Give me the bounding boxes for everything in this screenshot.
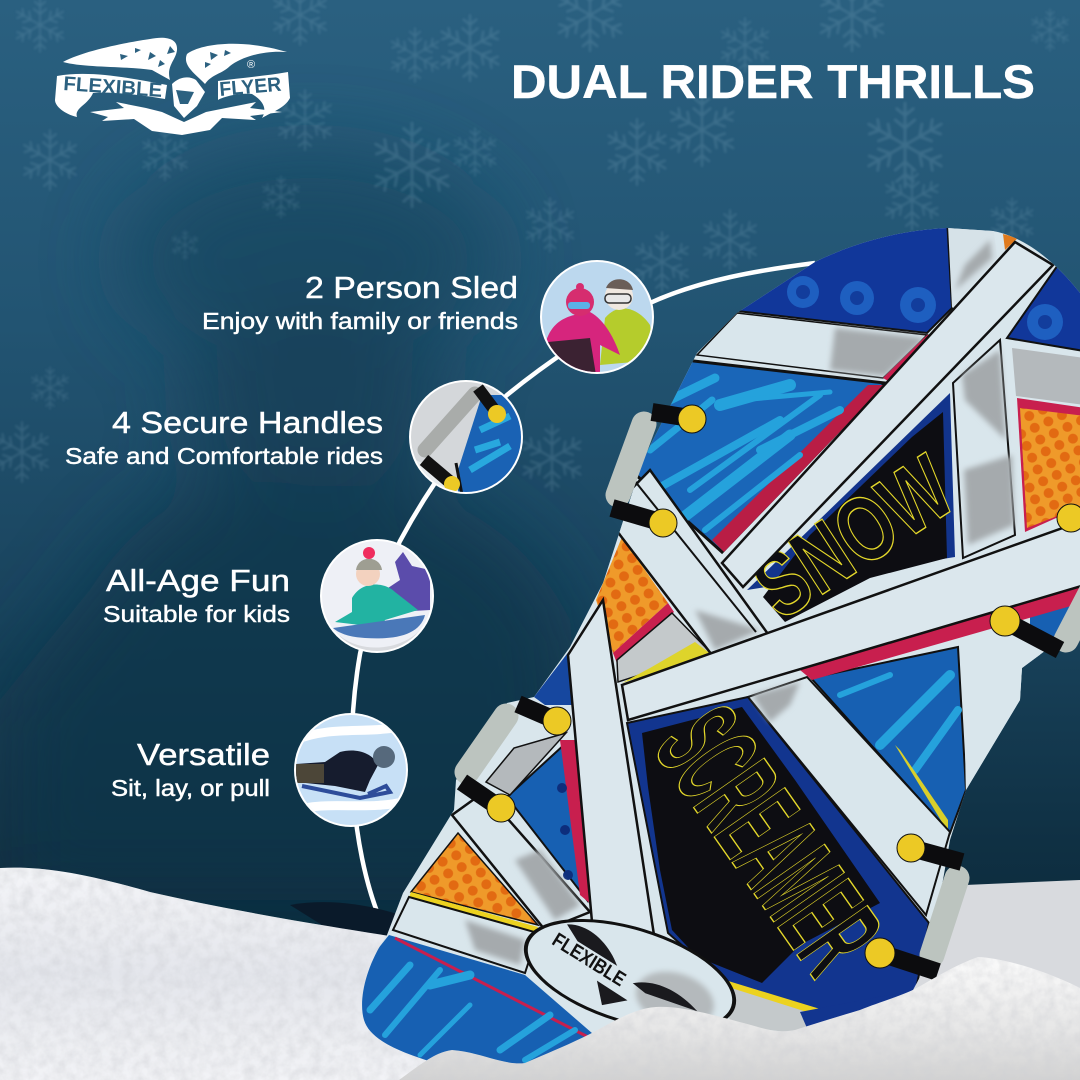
sled base — [381, 228, 1080, 1033]
top right bolt panel — [1007, 262, 1080, 352]
title: DUAL RIDER THRILLS — [511, 55, 1035, 108]
right white strip — [965, 654, 1040, 792]
long crossing band — [622, 520, 1080, 720]
blurred smiling child background — [0, 150, 590, 900]
left orange panel — [596, 537, 674, 666]
shadow at horizon — [290, 902, 400, 945]
yellow rivets — [487, 405, 1080, 968]
vertical gray band — [953, 340, 1015, 558]
top gray smear — [955, 240, 992, 290]
photo circle: handle close-up — [409, 380, 524, 495]
snow left mound — [0, 868, 450, 1080]
feature 4 text: Sit, lay, or pull — [111, 775, 270, 801]
badge FLEXIBLE text: FLEXIBLE — [548, 929, 629, 991]
lower right diagonal band — [748, 677, 950, 915]
logo left wing — [63, 38, 177, 80]
handle lower left — [467, 716, 506, 772]
handle right — [1066, 590, 1080, 640]
bottom dark blue — [800, 990, 915, 1035]
foreground snow — [399, 957, 1080, 1080]
feature 3 text — [103, 563, 290, 627]
logo registered mark: ® — [247, 59, 255, 71]
logo FLYER text: FLYER — [219, 74, 283, 101]
upper small blue panel — [534, 650, 575, 705]
left gray triangle — [617, 613, 712, 683]
lower cross band — [393, 897, 538, 973]
feature 3 text: All-Age Fun — [106, 563, 290, 598]
top bolt panel — [737, 218, 952, 333]
logo: Flexible Flyer — [55, 38, 290, 135]
handle lower right — [932, 878, 957, 955]
feature 1 text: 2 Person Sled — [305, 270, 518, 305]
connecting arc — [352, 263, 815, 935]
feature 1 text — [202, 270, 518, 334]
photo circle: two riders — [540, 260, 655, 375]
left diagonal band — [606, 470, 768, 655]
feature 4 text — [111, 737, 270, 801]
red strip under long band — [800, 585, 1080, 680]
right blue corner — [1030, 606, 1070, 637]
long vertical band — [568, 600, 654, 935]
feature 3 text: Suitable for kids — [103, 601, 290, 627]
logo lightning tail — [90, 102, 282, 135]
small orange tip — [1003, 234, 1018, 250]
bottom blue panel — [340, 935, 600, 1080]
top cross band — [697, 313, 927, 378]
lower left orange panel — [408, 833, 538, 935]
right orange panel — [1017, 398, 1080, 532]
lower right blue panel — [811, 647, 966, 833]
photo circle: boy lying on sled — [294, 713, 410, 828]
SNOW lettering: SNOW — [735, 436, 971, 639]
main blue panel — [636, 360, 885, 552]
lower left blue panel — [507, 740, 592, 905]
feature 2 text: 4 Secure Handles — [112, 405, 383, 440]
bottom right strip — [725, 983, 822, 1035]
snowflakes background — [0, 0, 1071, 491]
top vertical band — [948, 225, 997, 308]
background snow right — [900, 880, 1080, 1080]
long diagonal top band — [722, 242, 1053, 587]
logo body — [172, 77, 205, 118]
feature 4 text: Versatile — [137, 737, 270, 772]
logo right wing — [186, 44, 287, 84]
black straps — [462, 412, 1060, 972]
screamer lettering mass — [642, 707, 880, 983]
oval badge — [511, 897, 749, 1053]
logo FLEXIBLE text: FLEXIBLE — [63, 73, 163, 102]
gray strip near handle — [486, 733, 566, 795]
photo circle: girl on sled — [320, 539, 435, 660]
lower left diagonal band — [452, 792, 590, 930]
snow text panel — [747, 393, 955, 622]
feature 2 text — [65, 405, 383, 469]
logo right banner — [218, 72, 290, 118]
top right gray panel — [1012, 348, 1080, 405]
sled — [340, 218, 1080, 1080]
logo left banner — [55, 74, 167, 117]
feature 2 text: Safe and Comfortable rides — [65, 443, 383, 469]
screamer panel — [627, 684, 929, 1020]
handle top left — [618, 424, 644, 495]
snow lettering mass — [763, 412, 947, 622]
sled handles and straps — [462, 405, 1080, 972]
feature 1 text: Enjoy with family or friends — [202, 308, 518, 334]
